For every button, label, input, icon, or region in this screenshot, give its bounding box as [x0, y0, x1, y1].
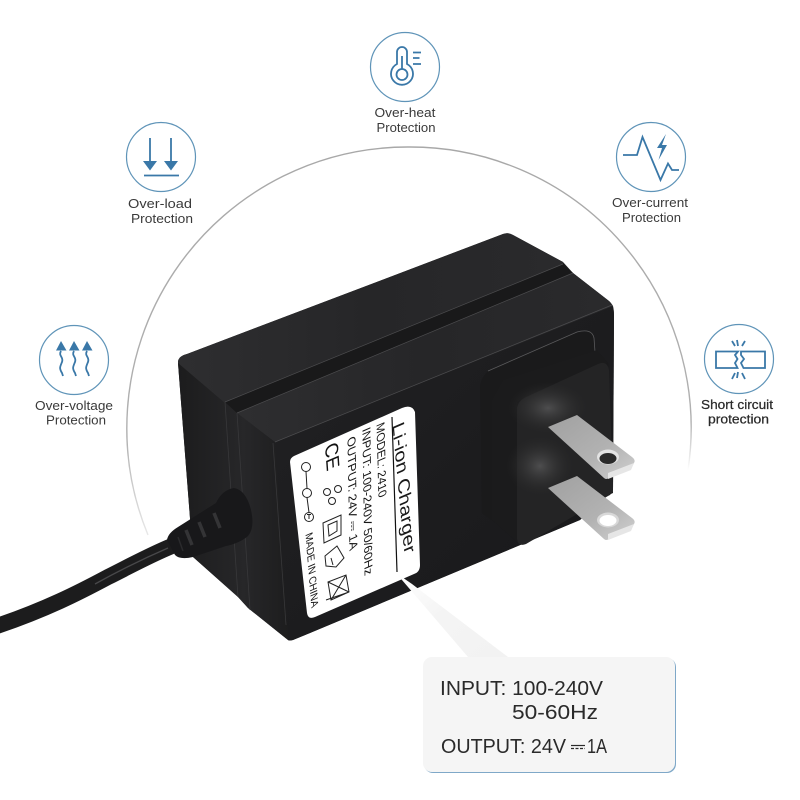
feature: over-current protection [612, 122, 688, 225]
charger cable [0, 546, 172, 627]
top face front shell [237, 273, 613, 442]
icon: rising wavy arrows [56, 341, 92, 376]
callout pointer [396, 573, 508, 657]
label: over-heat: Over-heat [374, 105, 436, 120]
feature: over-voltage protection [35, 326, 113, 428]
feature: over-heat protection [370, 32, 440, 135]
label specifications [303, 420, 389, 610]
left side face [178, 358, 288, 640]
lower prong [548, 476, 635, 540]
upper prong [548, 415, 635, 479]
plug assembly [480, 331, 635, 545]
feature: over-load protection [126, 122, 196, 226]
label recycle symbol [324, 486, 342, 504]
input specification: 50-60Hz [512, 702, 598, 724]
label specifications: MODEL: 2410 [374, 420, 389, 500]
label double insulation symbol [323, 515, 341, 543]
label: short circuit: Short circuit [701, 397, 773, 412]
power adapter body [178, 233, 614, 640]
output specification: OUTPUT: 24V [441, 736, 567, 758]
icon: spike waveform with bolt [623, 134, 679, 180]
label CE mark: CE [320, 439, 342, 474]
icon: broken wire [716, 340, 765, 379]
label: over-load: Over-load [128, 196, 192, 211]
plug front face [517, 363, 613, 545]
label: over-current: Protection [622, 210, 681, 225]
icon: thermometer [391, 47, 421, 85]
feature: short circuit protection [701, 324, 774, 426]
label: short circuit: protection [708, 412, 769, 426]
label specifications: OUTPUT: 24V ⎓ 1A [345, 434, 360, 553]
label: over-heat: Protection [376, 120, 436, 135]
label: over-voltage: Over-voltage [35, 398, 113, 413]
label: over-load: Protection [131, 211, 193, 226]
plug collar [492, 350, 608, 545]
callout: electrical specifications [423, 657, 676, 773]
icon: down arrows over line [143, 138, 179, 176]
label recycling bin symbol [326, 575, 349, 600]
label indoor use symbol [325, 546, 344, 567]
output specification: 1A [587, 736, 608, 758]
cable strain relief [167, 488, 252, 558]
top groove [225, 264, 573, 413]
product label [290, 407, 420, 618]
label: over-voltage: Protection [46, 412, 106, 428]
label specifications: INPUT: 100-240V 50/60Hz [360, 425, 375, 578]
label specifications: MADE IN CHINA [303, 531, 320, 610]
label polarity symbol [302, 462, 314, 522]
plug recess [480, 331, 613, 537]
label rule [392, 417, 397, 572]
label title: Li-ion Charger [389, 419, 419, 556]
background arc [127, 147, 691, 535]
label: over-current: Over-current [612, 195, 688, 210]
base silhouette [178, 233, 614, 640]
top face rear shell [178, 233, 563, 403]
front face [275, 306, 614, 640]
input specification: INPUT: 100-240V [440, 678, 604, 700]
